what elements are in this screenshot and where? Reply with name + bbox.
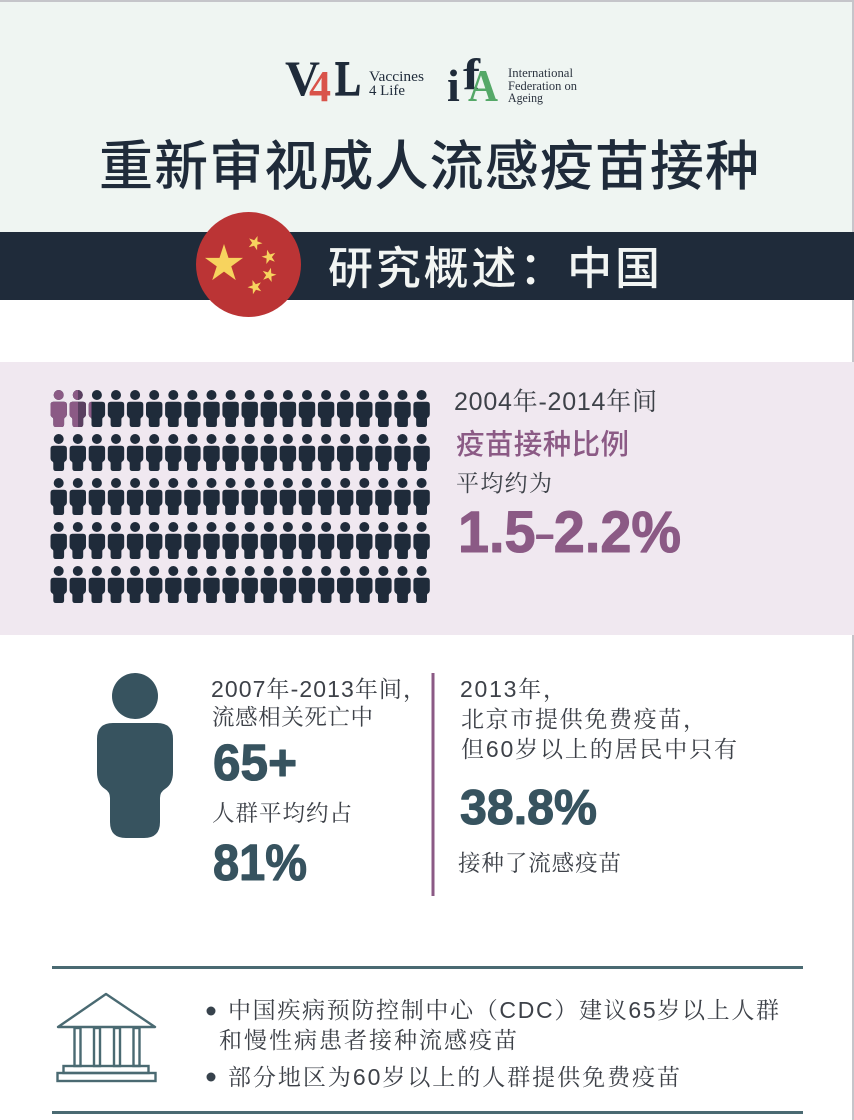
text: 北京市提供免费疫苗， — [461, 706, 706, 733]
header background — [0, 0, 854, 232]
stat: 81%: 81% — [213, 834, 307, 891]
logo: Vaccines 4 Life: L — [335, 50, 361, 106]
icon: government building — [58, 994, 156, 1081]
logo: International Federation on Ageing: f — [463, 50, 482, 99]
logo: Vaccines 4 Life: 4 Life — [369, 83, 405, 99]
panel: vaccination rate — [0, 362, 854, 635]
divider — [432, 673, 434, 896]
bullet list — [206, 997, 779, 1090]
text: years: 2004年-2014年间 — [454, 388, 657, 416]
banner heading: 研究概述：中国 — [328, 243, 660, 294]
logo: Vaccines 4 Life: V — [285, 50, 320, 106]
text: vaccinated: 接种了流感疫苗 — [458, 851, 621, 876]
logo: International Federation on Ageing: Ageing — [508, 91, 544, 105]
stat: 38.8%: 38.8% — [460, 781, 597, 835]
logo: Vaccines 4 Life — [285, 50, 424, 111]
logo: International Federation on Ageing — [447, 50, 578, 111]
text: flu deaths: 2007年-2013年间， — [211, 676, 426, 703]
stat: 1.5-2.2%: 1.5 — [458, 500, 539, 565]
logo: Vaccines 4 Life: 4 — [309, 62, 331, 111]
text: 但60岁以上的居民中只有 — [461, 736, 737, 762]
icon: China flag — [196, 212, 301, 317]
text: group average: 人群平均约占 — [212, 801, 352, 826]
logo: International Federation on Ageing: A — [468, 60, 498, 111]
stat: 65+: 65+ — [213, 734, 297, 791]
stat: 1.5-2.2%: – — [536, 516, 554, 554]
title: 重新审视成人流感疫苗接种 — [99, 137, 759, 197]
stat: 1.5-2.2%: 2.2% — [554, 500, 681, 565]
text: Beijing: 2013年， — [460, 676, 566, 703]
rule — [52, 1111, 803, 1114]
banner — [0, 232, 854, 300]
text: 流感相关死亡中 — [212, 705, 373, 730]
logo: International Federation on Ageing: Federation on — [508, 79, 578, 93]
logo: International Federation on Ageing: i — [447, 60, 460, 111]
icon: person — [97, 673, 173, 838]
logo: International Federation on Ageing: International — [508, 66, 574, 80]
rule — [52, 966, 803, 969]
logo: Vaccines 4 Life: Vaccines — [369, 69, 424, 85]
bullet list: 和慢性病患者接种流感疫苗 — [219, 1027, 517, 1053]
people pictogram — [50, 390, 430, 603]
bullet list: 中国疾病预防控制中心（CDC）建议65岁以上人群 — [228, 997, 779, 1023]
bullet list: 部分地区为60岁以上的人群提供免费疫苗 — [228, 1064, 680, 1090]
text: vaccination proportion: 疫苗接种比例 — [456, 429, 629, 461]
text: average: 平均约为 — [456, 470, 552, 496]
